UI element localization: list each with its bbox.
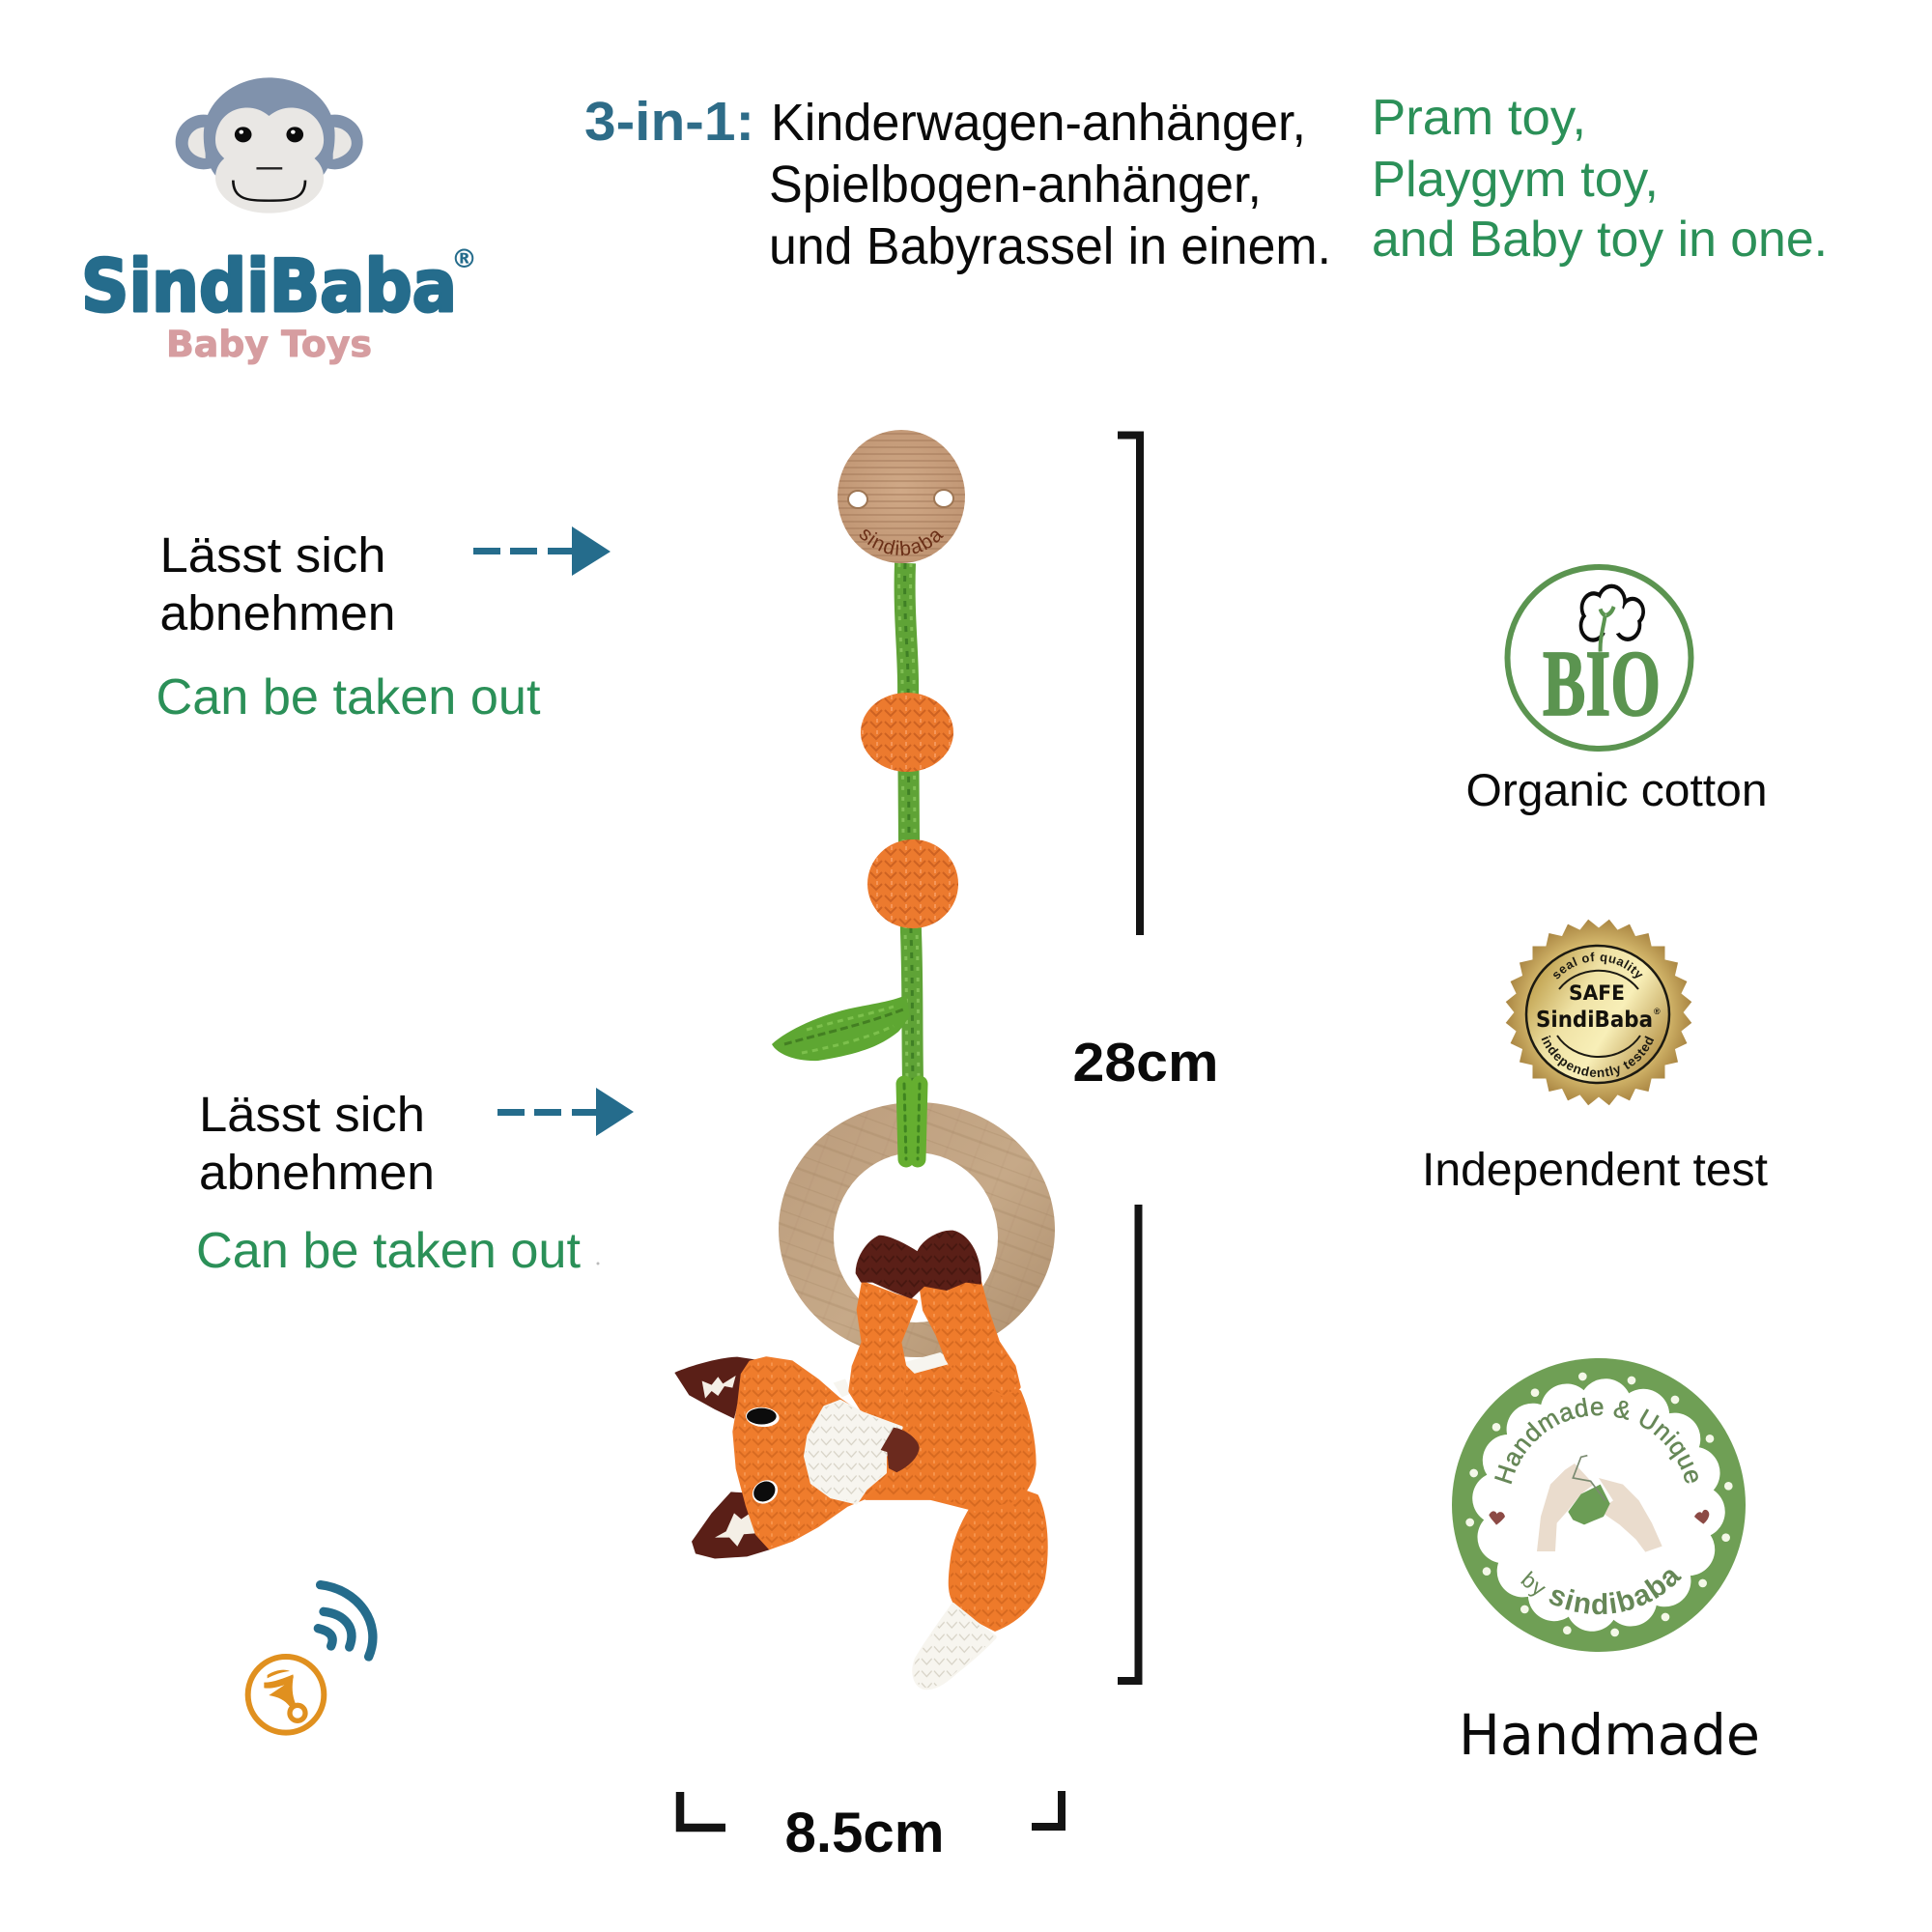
seal registered mark: ® bbox=[1654, 1007, 1661, 1016]
wooden clip bbox=[838, 430, 965, 563]
dimension: width bracket left bbox=[680, 1792, 725, 1828]
tagline: Baby Toys bbox=[166, 324, 372, 365]
logo: SindiBaba Baby Toys bbox=[81, 77, 477, 365]
callout text German: Lässt sich bbox=[160, 527, 386, 582]
BIO lettering: BIO bbox=[1543, 632, 1661, 736]
callout text German bbox=[160, 527, 396, 640]
badge: independent test bbox=[1422, 920, 1768, 1196]
icon: hands crocheting bbox=[1537, 1456, 1662, 1552]
wooden ring bbox=[779, 1102, 1055, 1357]
product: crochet fox pram toy bbox=[674, 430, 1055, 1690]
registered mark: ® bbox=[451, 244, 477, 274]
arrow: to wooden ring bbox=[497, 1088, 634, 1136]
engraved clip text: sindibaba bbox=[860, 529, 944, 556]
fox feet bbox=[857, 1232, 980, 1297]
label: Independent test bbox=[1422, 1145, 1768, 1196]
callout text English: Can be taken out bbox=[156, 669, 541, 725]
text block: English description: Playgym toy, bbox=[1372, 152, 1659, 208]
heading: 3-in-1 label: 3-in-1: bbox=[584, 91, 754, 153]
white scallop bbox=[1470, 1377, 1727, 1634]
text block: German description: und Babyrassel in einem. bbox=[769, 217, 1331, 275]
fox arms bbox=[850, 1281, 1019, 1424]
upper orange bead bbox=[861, 693, 953, 772]
seal SAFE: SAFE bbox=[1569, 981, 1625, 1005]
crochet fox bbox=[674, 1232, 1046, 1688]
fox ear upper bbox=[674, 1357, 761, 1419]
icon: monkey face bbox=[176, 77, 363, 213]
dimension: height bracket lower bbox=[1118, 1205, 1138, 1681]
green leaf bbox=[772, 995, 910, 1061]
badge: handmade bbox=[1452, 1358, 1760, 1768]
dimension: 8.5cm: 8.5cm bbox=[784, 1802, 945, 1864]
badge arc text top: Handmade & Unique bbox=[1494, 1397, 1698, 1484]
rim dots bbox=[1465, 1373, 1733, 1636]
badge arc text bottom: by sindibaba bbox=[1520, 1570, 1682, 1615]
badge: organic cotton bbox=[1466, 567, 1768, 816]
text block: English description bbox=[1372, 90, 1828, 268]
text block: English description: Pram toy, bbox=[1372, 90, 1586, 146]
green disc bbox=[1452, 1358, 1746, 1652]
seal brand: SindiBaba bbox=[1536, 1008, 1653, 1033]
green cord bbox=[899, 563, 919, 1082]
fox tail bbox=[914, 1489, 1046, 1688]
text block: German description: Spielbogen-anhänger, bbox=[769, 156, 1262, 213]
seal top text: seal of quality bbox=[1553, 952, 1643, 980]
text block: English description: and Baby toy in one. bbox=[1372, 212, 1828, 268]
label: Organic cotton bbox=[1466, 765, 1768, 816]
callout: lower detachable bbox=[196, 1087, 634, 1279]
brand name: SindiBaba bbox=[81, 243, 457, 328]
icon: rattle with sound waves bbox=[248, 1585, 373, 1733]
dimension: height bracket upper bbox=[1118, 435, 1140, 935]
lower orange bead bbox=[867, 839, 958, 928]
seal arcs bbox=[1557, 971, 1640, 1057]
fox head bbox=[734, 1358, 920, 1548]
cord loop on ring bbox=[904, 1084, 920, 1159]
gold seal bbox=[1506, 920, 1691, 1105]
fox body bbox=[834, 1352, 1034, 1509]
callout: upper detachable bbox=[156, 526, 611, 725]
label: Handmade bbox=[1459, 1702, 1760, 1768]
hearts bbox=[1489, 1510, 1709, 1525]
arrow: to wooden clip bbox=[473, 526, 611, 576]
seal bottom text: independently tested bbox=[1542, 1036, 1654, 1078]
dimension: width bracket right bbox=[1032, 1791, 1062, 1827]
text block: German description: Kinderwagen-anhänger, bbox=[771, 94, 1306, 152]
BIO circle bbox=[1507, 567, 1690, 749]
callout text German: abnehmen bbox=[160, 585, 396, 640]
callout text English: Can be taken out bbox=[196, 1223, 582, 1279]
callout text German: Lässt sich bbox=[199, 1087, 425, 1142]
dimension: 28cm: 28cm bbox=[1072, 1032, 1219, 1094]
icon: cotton plant bbox=[1581, 586, 1643, 652]
callout text German bbox=[199, 1087, 435, 1200]
fox ear lower bbox=[692, 1492, 770, 1558]
callout text German: abnehmen bbox=[199, 1145, 435, 1200]
text block: German description bbox=[769, 94, 1331, 275]
